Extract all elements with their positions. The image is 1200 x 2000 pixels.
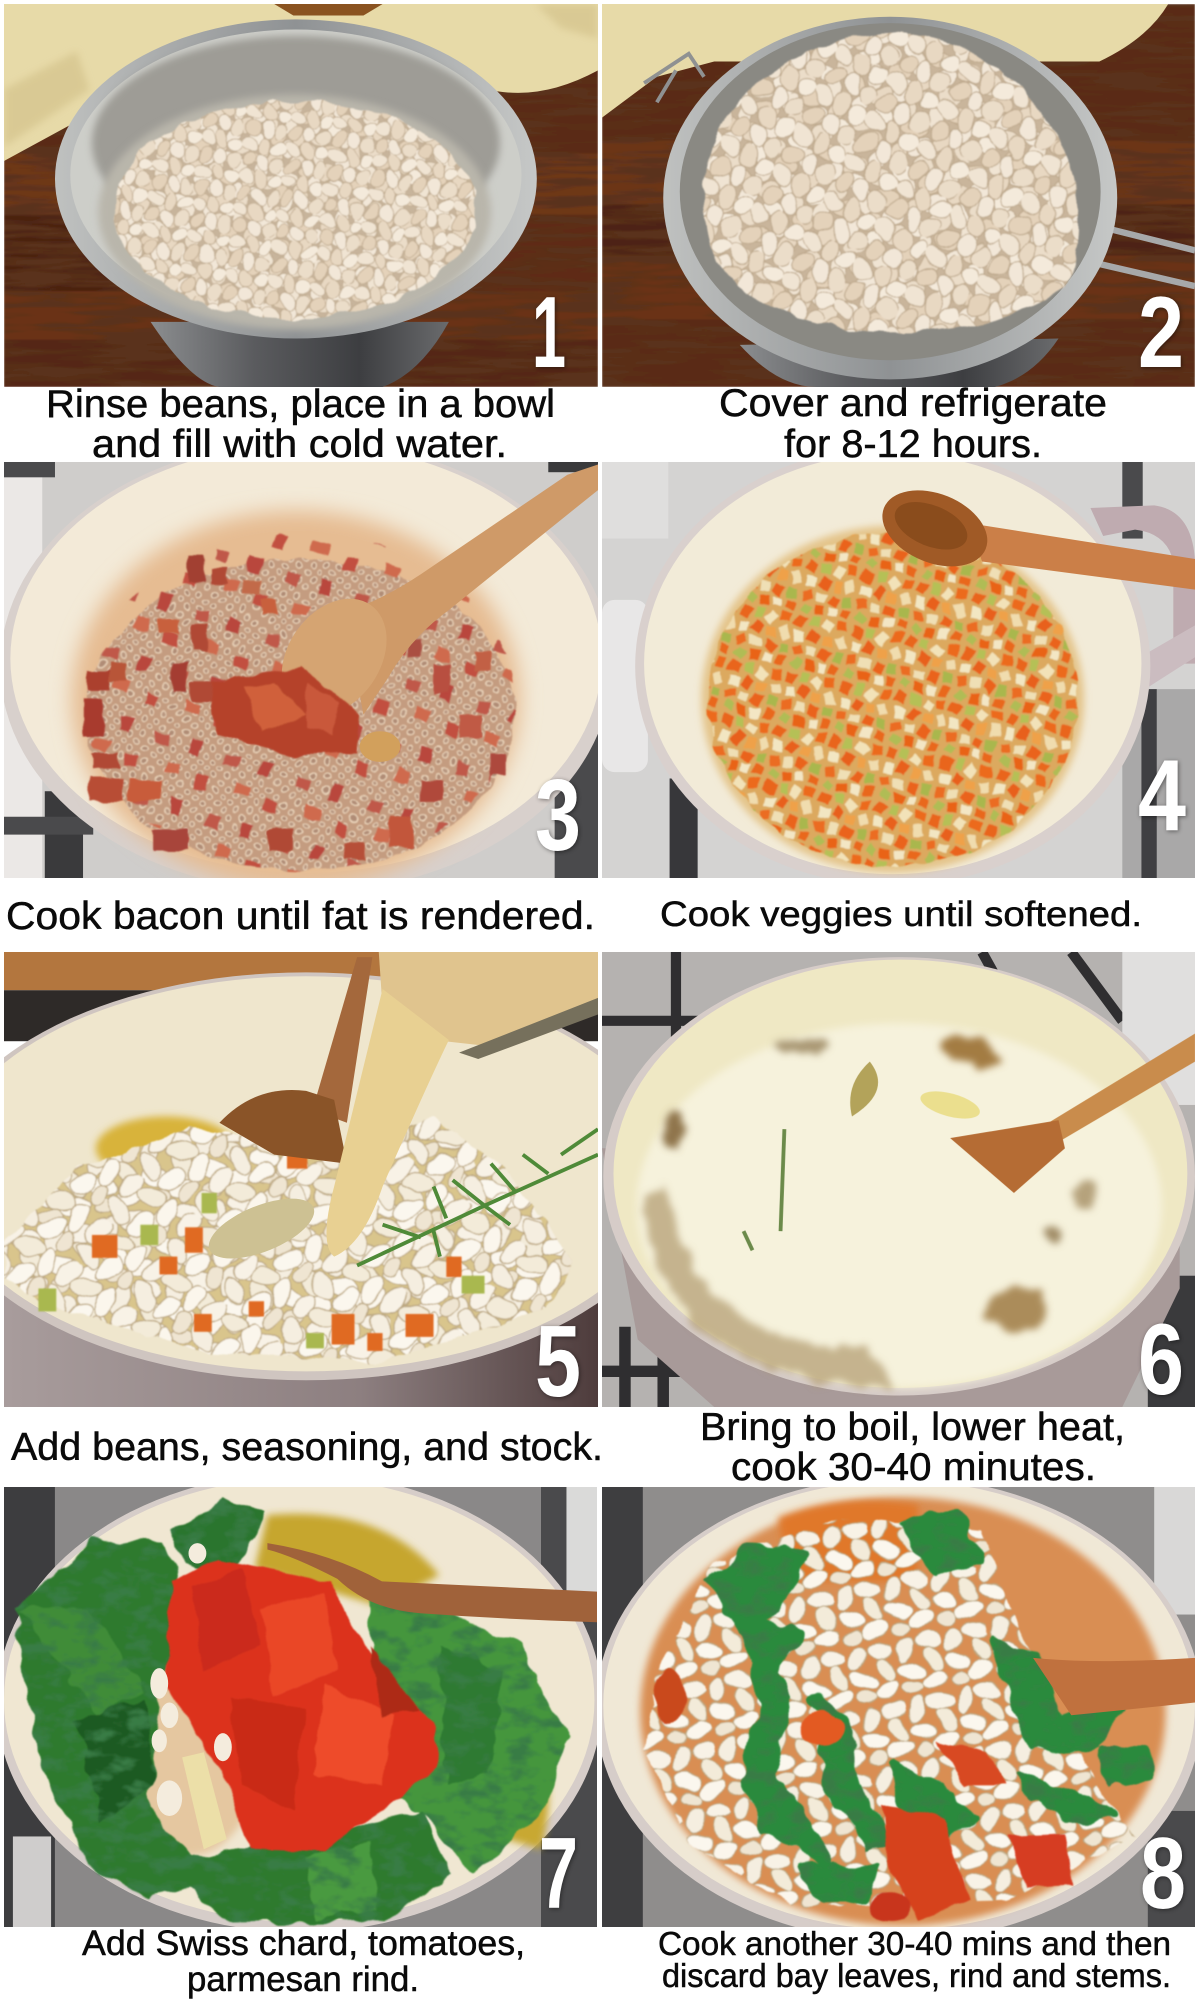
bay leaf bbox=[201, 1186, 322, 1271]
photo: foaming soup in a pot bbox=[602, 952, 1195, 1407]
tomatoes bbox=[166, 1558, 439, 1852]
photo: bacon rendering in a pot bbox=[4, 462, 598, 878]
foam and browned edges bbox=[636, 1023, 1162, 1388]
beans and soup under the greens bbox=[121, 1639, 261, 1856]
yellow broth bbox=[96, 1116, 236, 1180]
caption: step 7: Add Swiss chard, tomatoes, bbox=[82, 1924, 525, 1963]
panel: step 3 cook bacon bbox=[0, 440, 612, 938]
caption: step 2: Cover and refrigerate bbox=[719, 382, 1107, 425]
photo: stock poured over beans bbox=[4, 952, 598, 1407]
white beans bbox=[150, 1543, 232, 1816]
bacon pieces bbox=[84, 555, 506, 860]
photo: beans in a strainer bbox=[602, 4, 1195, 387]
panel: step 8 finish cooking bbox=[596, 1477, 1200, 1994]
wooden spoon bbox=[1033, 1658, 1195, 1715]
beans in strainer bbox=[704, 31, 1079, 332]
wooden spoon bbox=[950, 1034, 1195, 1193]
photo: chard and tomatoes in a pot bbox=[4, 1487, 597, 1927]
caption: step 6: Bring to boil, lower heat, bbox=[700, 1406, 1125, 1449]
panel: step 7 add greens and tomatoes bbox=[0, 1473, 602, 1999]
step number 2: 2 bbox=[1138, 277, 1184, 389]
caption: step 5: Add beans, seasoning, and stock. bbox=[11, 1426, 603, 1469]
tomato chunks bbox=[654, 1668, 1074, 1922]
diced carrot, celery and onion bbox=[701, 526, 1084, 873]
wooden spoon bbox=[267, 1543, 597, 1622]
panel: step 2 refrigerate bbox=[602, 4, 1195, 466]
caption: step 2: for 8-12 hours. bbox=[784, 423, 1042, 466]
tomato broth bbox=[640, 1497, 1166, 1926]
caption: step 7: parmesan rind. bbox=[187, 1960, 419, 1999]
beans, carrot and celery bbox=[4, 1116, 574, 1362]
bay leaf and herbs bbox=[744, 1062, 983, 1250]
step number 7: 7 bbox=[539, 1818, 578, 1930]
step number 3: 3 bbox=[535, 760, 581, 872]
parmesan rind bbox=[182, 1752, 227, 1849]
white beans bbox=[644, 1518, 1135, 1907]
rosemary sprig bbox=[357, 1129, 598, 1266]
chard leaves bbox=[708, 1514, 1150, 1898]
photo: beans soaking in a steel bowl bbox=[4, 4, 598, 387]
step number 1: 1 bbox=[532, 277, 566, 389]
step number 4: 4 bbox=[1138, 740, 1186, 852]
panel: step 1 rinse beans bbox=[4, 4, 598, 466]
wooden spoon bbox=[219, 957, 372, 1164]
photo: diced vegetables in a pot bbox=[602, 462, 1195, 878]
caption: step 1: and fill with cold water. bbox=[92, 423, 507, 466]
panel: step 5 add beans bbox=[0, 952, 678, 1469]
caption: step 8: discard bay leaves, rind and stems. bbox=[662, 1957, 1171, 1994]
pot handle bbox=[1090, 505, 1195, 664]
step number 8: 8 bbox=[1140, 1818, 1186, 1930]
step number 6: 6 bbox=[1138, 1304, 1184, 1416]
rendered fat and bubbles bbox=[72, 510, 520, 888]
panel: step 6 simmer bbox=[602, 952, 1195, 1489]
step number 5: 5 bbox=[535, 1306, 581, 1418]
photo: finished white bean soup bbox=[602, 1487, 1195, 1927]
glass and stock stream bbox=[326, 952, 598, 1257]
panel: step 4 cook veggies bbox=[602, 447, 1195, 934]
caption: step 8: Cook another 30-40 mins and then bbox=[658, 1925, 1171, 1962]
wooden spoon with bacon bbox=[210, 465, 598, 762]
caption: step 6: cook 30-40 minutes. bbox=[731, 1446, 1096, 1489]
beans in bowl bbox=[114, 101, 476, 318]
wooden spoon bbox=[871, 476, 1195, 590]
caption: step 3: Cook bacon until fat is rendered. bbox=[6, 895, 595, 938]
caption: step 4: Cook veggies until softened. bbox=[660, 895, 1142, 934]
yellow broth bbox=[255, 1514, 439, 1607]
caption: step 1: Rinse beans, place in a bowl bbox=[46, 383, 555, 426]
Swiss chard bbox=[15, 1497, 568, 1923]
